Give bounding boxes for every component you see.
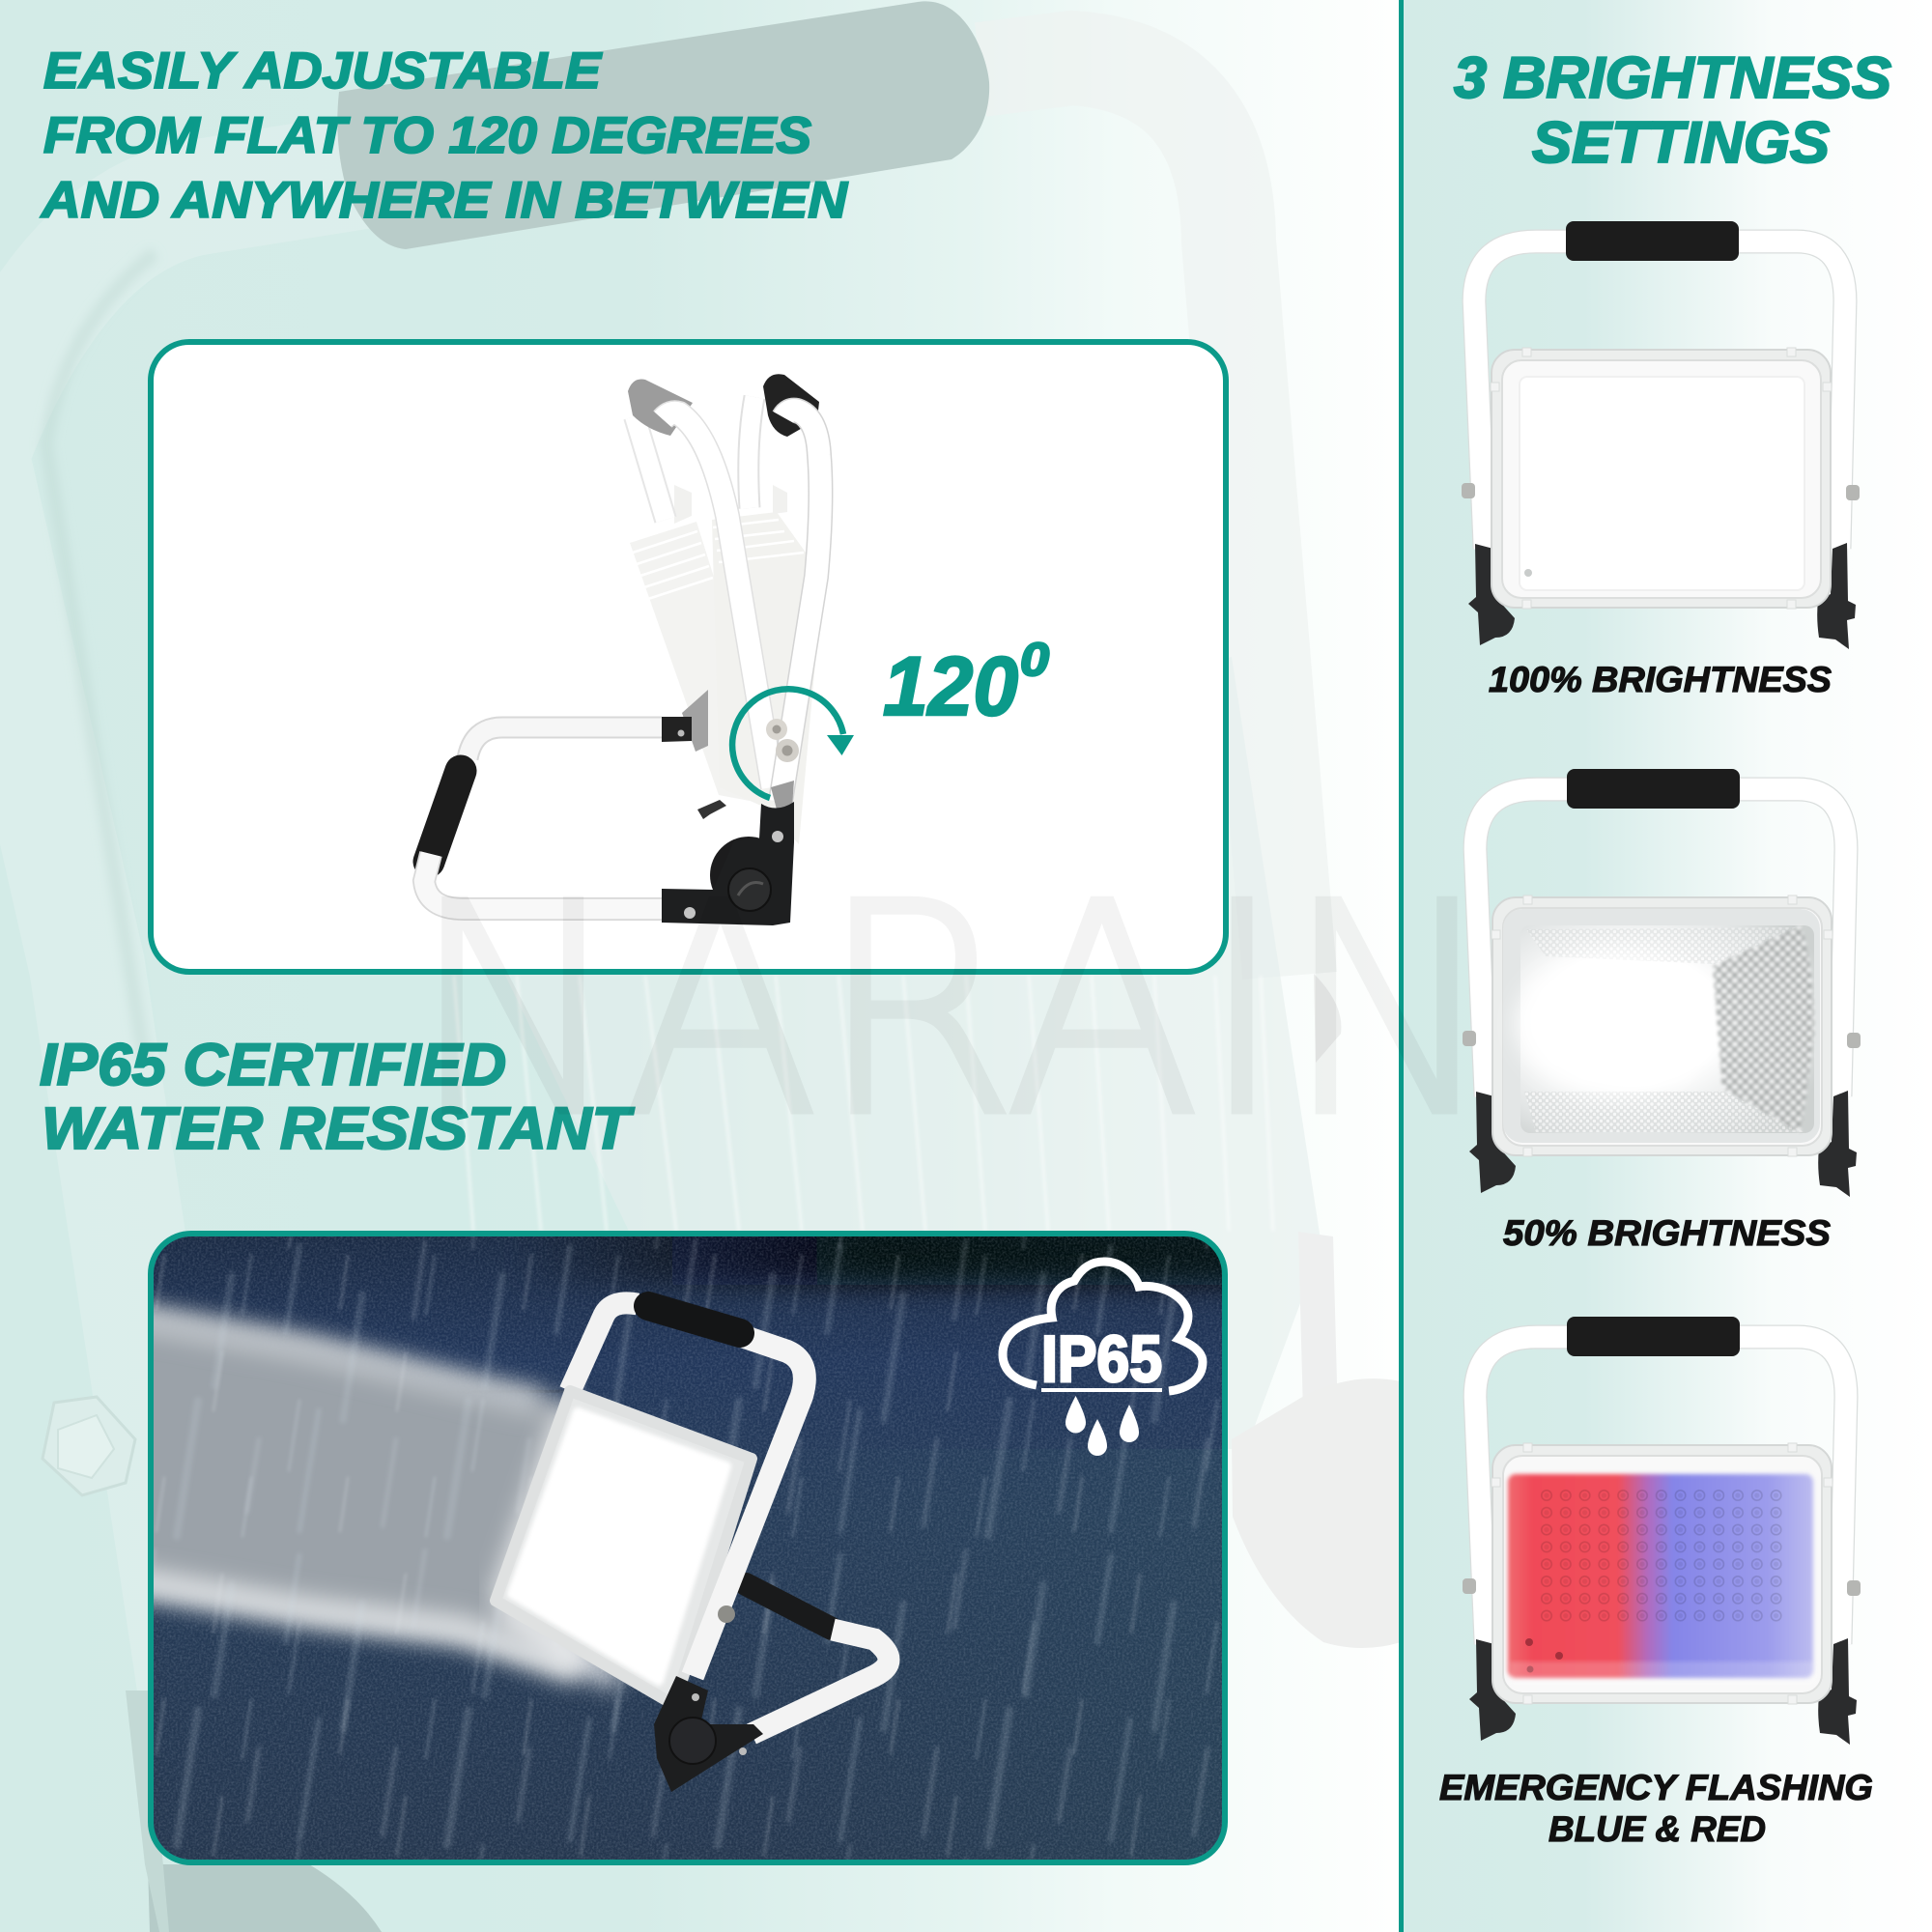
- arrow: rotation: [732, 689, 854, 798]
- label: 100% brightness: 100% BRIGHTNESS: [1489, 660, 1832, 699]
- label: emergency flashing: [1439, 1768, 1873, 1849]
- lamp glow: [502, 1410, 618, 1681]
- label: 120 degrees: 0: [1020, 635, 1049, 686]
- heading: easily adjustable: FROM FLAT TO 120 DEGREES: [43, 107, 811, 164]
- background: right area: [1404, 0, 1932, 1932]
- heading: IP65 certified: WATER RESISTANT: [42, 1095, 635, 1161]
- heading: 3 brightness settings: SETTINGS: [1532, 110, 1830, 175]
- panel: rain photo: [148, 1231, 1228, 1865]
- heading: easily adjustable: AND ANYWHERE IN BETWEEN: [40, 172, 849, 229]
- ghost handle foam: [337, 1, 989, 249]
- hinge: [662, 802, 794, 925]
- rear fork tube: [749, 397, 754, 508]
- heading: IP65 certified: IP65 CERTIFIED: [40, 1032, 506, 1097]
- heading: easily adjustable: [40, 43, 849, 229]
- lamp: emergency flashing: [1463, 1317, 1861, 1745]
- panel: adjustable angle: [151, 342, 1226, 972]
- lamp in rain: [496, 1303, 889, 1792]
- upright tube: [763, 374, 820, 810]
- watermark: NARAIN: [411, 842, 1497, 1179]
- heading: IP65 certified: [40, 1032, 635, 1161]
- label: emergency flashing: EMERGENCY FLASHING: [1439, 1768, 1873, 1807]
- lamp: 100% brightness: [1462, 221, 1860, 649]
- faded lamp positions: [628, 379, 823, 844]
- lamp: 50% brightness: [1463, 769, 1861, 1197]
- base frame: [424, 717, 692, 909]
- ghost bolt: [43, 1397, 135, 1495]
- icon: IP65 cloud: [1003, 1262, 1203, 1456]
- icon: IP65 cloud: IP65: [1041, 1322, 1162, 1396]
- light beam: [126, 1306, 585, 1676]
- background: left area: [0, 0, 1399, 1932]
- heading: 3 brightness settings: [1454, 45, 1891, 175]
- label: emergency flashing: BLUE & RED: [1548, 1809, 1766, 1849]
- heading: 3 brightness settings: 3 BRIGHTNESS: [1454, 45, 1891, 110]
- heading: easily adjustable: EASILY ADJUSTABLE: [43, 43, 603, 99]
- ghost product background: [0, 58, 1401, 1932]
- divider: [1399, 0, 1404, 1932]
- bolts: [766, 719, 799, 762]
- label: 50% brightness: 50% BRIGHTNESS: [1503, 1213, 1831, 1253]
- label: 120 degrees: 120: [883, 640, 1018, 733]
